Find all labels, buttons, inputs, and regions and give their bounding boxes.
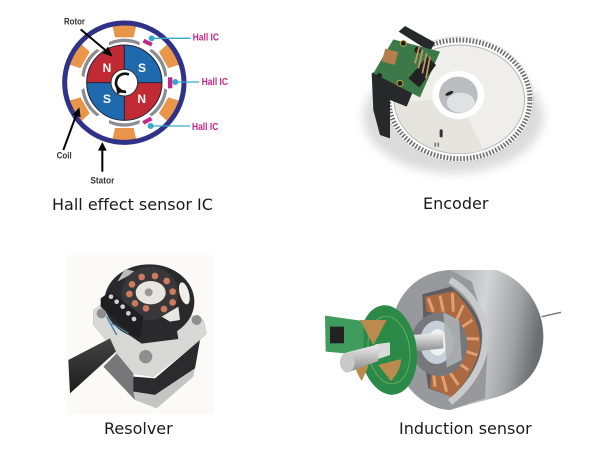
- diagram labels: Stator: [90, 176, 115, 186]
- sensor PCB: [325, 316, 363, 355]
- motor body: [103, 340, 200, 408]
- end plate: [391, 270, 488, 410]
- front shaft: [340, 342, 390, 372]
- PCB: [373, 39, 440, 97]
- photo background: [67, 255, 214, 414]
- photo: resolver: [67, 255, 214, 414]
- rotor: S: [138, 61, 146, 75]
- Hall IC sensors and leaders: Hall IC: [193, 33, 219, 44]
- caption: Resolver: Resolver: [104, 419, 173, 438]
- disc marks: [435, 129, 443, 147]
- caption: Encoder: Encoder: [423, 194, 489, 213]
- callout arrows: [63, 29, 108, 172]
- photo: encoder: [363, 26, 543, 173]
- motor can: [450, 270, 543, 410]
- cut edge of can: [450, 280, 486, 402]
- diagram labels: Rotor: [64, 17, 85, 27]
- gold rotor blades: [352, 320, 401, 381]
- rotor: N: [103, 61, 111, 75]
- Hall IC sensors and leaders: Hall IC: [202, 77, 228, 88]
- rotor bearing: [411, 312, 467, 376]
- diagram: Hall effect sensor IC: [57, 17, 228, 186]
- rotor: N: [137, 92, 146, 106]
- centre hole: [432, 71, 484, 119]
- Hall IC sensors and leaders: Hall IC: [192, 122, 218, 133]
- caption: Induction sensor: Induction sensor: [399, 419, 532, 438]
- diagram labels: Coil: [57, 151, 72, 161]
- diagram labels: [57, 17, 115, 186]
- wires: [107, 317, 128, 335]
- green sensor disc: [354, 301, 423, 399]
- arrowheads: [73, 47, 113, 151]
- read head housing: [372, 26, 435, 138]
- rotor: S: [103, 92, 111, 106]
- coils: [67, 25, 182, 140]
- white bracket: [162, 307, 180, 322]
- cable: [68, 338, 116, 393]
- stator ring: [65, 23, 184, 142]
- photo: induction sensor: [325, 270, 561, 410]
- pin header: [408, 47, 436, 87]
- encoder disc: [385, 37, 533, 162]
- disc shadow: [363, 60, 543, 173]
- cutaway pocket: [422, 287, 482, 397]
- caption: Hall effect sensor IC: Hall effect sensor IC: [52, 195, 213, 214]
- Hall IC sensors and leaders: [142, 33, 228, 133]
- rotor: [87, 45, 162, 120]
- motor lead wire: [542, 312, 561, 317]
- stator windings: [126, 273, 176, 312]
- rotor hub: [136, 281, 166, 304]
- stator windings: [425, 291, 480, 397]
- resolver housing: [104, 264, 194, 344]
- mounting plate: [93, 288, 207, 377]
- connector block: [101, 292, 143, 338]
- plate screws: [97, 308, 202, 363]
